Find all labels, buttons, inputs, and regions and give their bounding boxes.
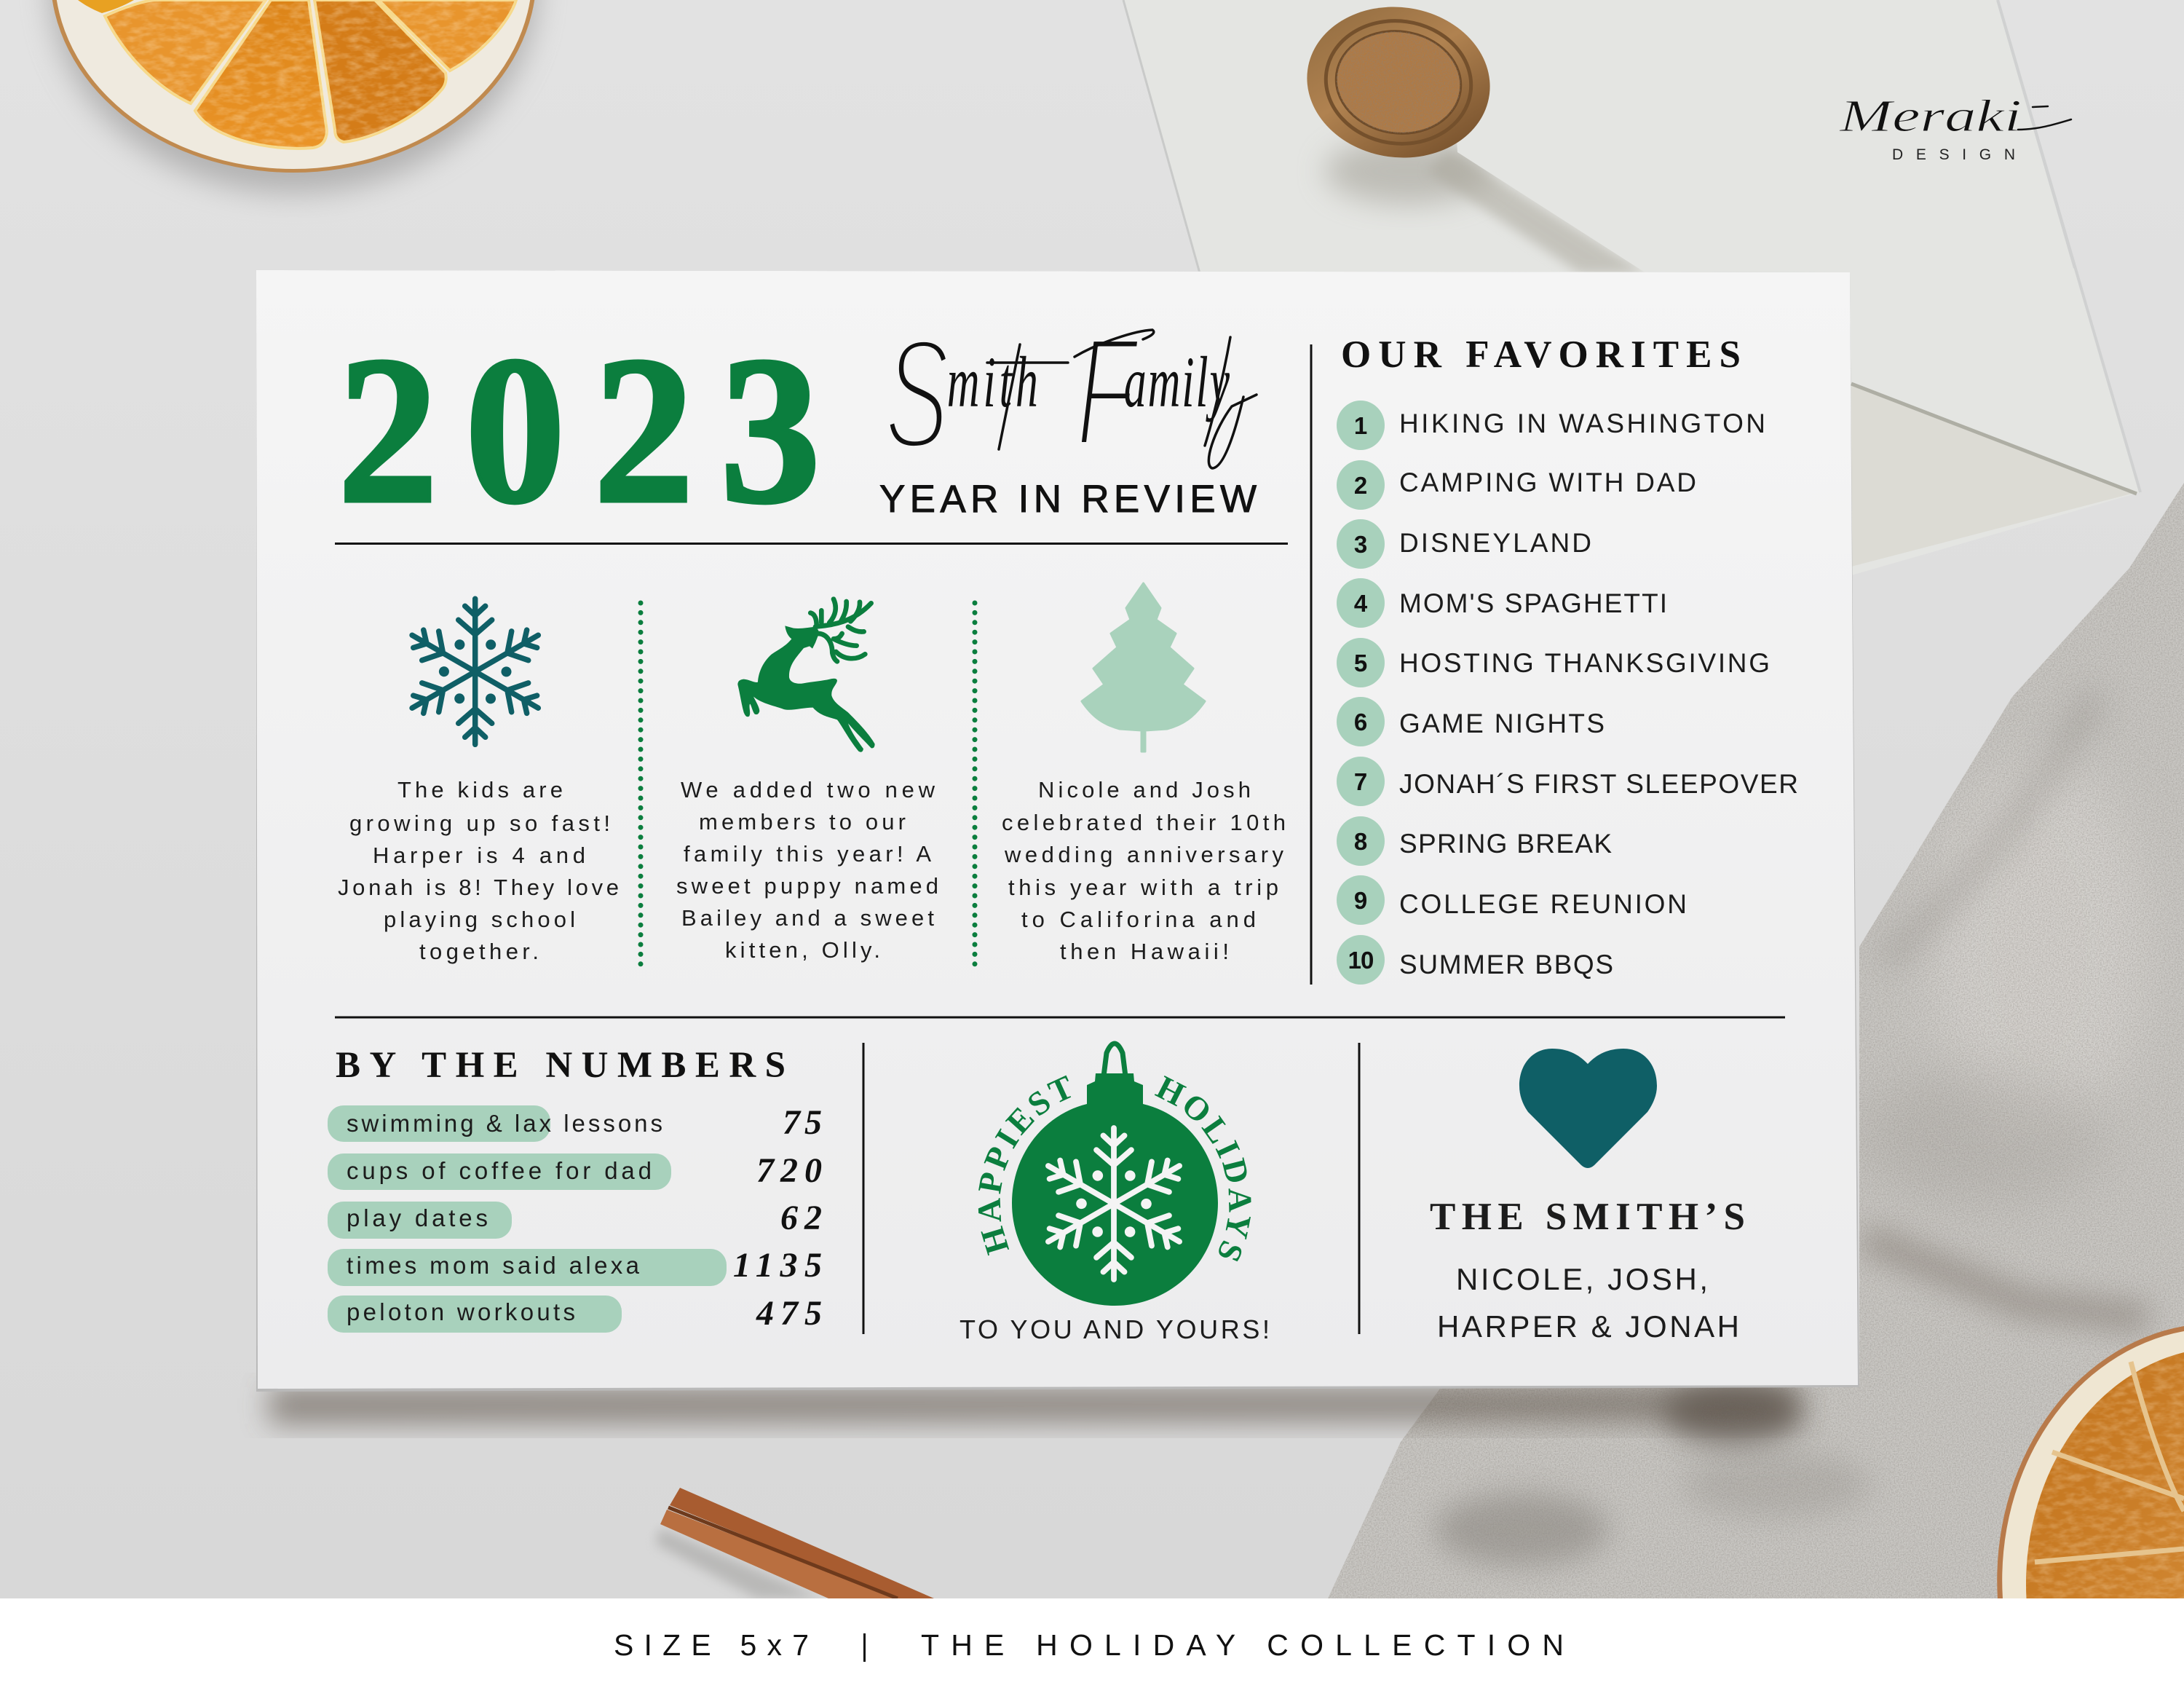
linen cloth <box>1310 466 2184 1598</box>
stat: play dates: 62 <box>780 1199 822 1237</box>
stat: peloton <box>328 1294 822 1333</box>
favorite 8: 8 <box>1354 828 1367 855</box>
favorite 7: JONAH´S FIRST SLEEPOVER <box>1399 769 1798 799</box>
dried orange slice, bottom right <box>1997 1326 2184 1598</box>
favorite 4: 4 <box>1354 590 1368 617</box>
story text: kids: The kids are <box>397 777 563 802</box>
icon: leaping reindeer <box>737 599 875 752</box>
icon: heart <box>1519 1049 1657 1168</box>
favorite 8: SPRING BREAK <box>1399 829 1612 859</box>
card shadow <box>269 1387 1798 1424</box>
story text: anniversary: to Califorina and <box>1021 907 1256 932</box>
story text: pets: members to our <box>699 809 906 835</box>
year heading: 2023: 2023 <box>338 314 820 548</box>
story text: anniversary: celebrated their 10th <box>1002 810 1286 835</box>
curved text: happiest: HAPPIEST <box>978 1075 1072 1255</box>
stat: coffee: cups of coffee for dad <box>347 1157 652 1184</box>
heading: our favorites: OUR FAVORITES <box>1341 334 1741 376</box>
favorite 3: DISNEYLAND <box>1399 528 1591 558</box>
favorite 4: MOM'S SPAGHETTI <box>1399 588 1667 618</box>
story column 1 <box>338 599 619 964</box>
card <box>256 270 1859 1392</box>
cinnamon sticks <box>655 1488 934 1598</box>
favorite 9: COLLEGE REUNION <box>1399 889 1687 919</box>
script title: Smith Family: F <box>1076 304 1140 479</box>
family members line 2: HARPER & JONAH <box>1437 1309 1739 1344</box>
dried orange slice, top left <box>50 0 537 193</box>
favorite 6 <box>1337 697 1605 746</box>
panel: by the numbers <box>328 1045 822 1333</box>
favorite 1: HIKING IN WASHINGTON <box>1399 409 1765 438</box>
story text: kids: playing school <box>384 907 575 932</box>
stat: alexa <box>328 1246 822 1286</box>
favorite 5: 5 <box>1354 650 1367 677</box>
story text: anniversary <box>1002 777 1286 964</box>
story text: pets: sweet puppy named <box>676 873 938 899</box>
stat: coffee: 720 <box>756 1151 822 1190</box>
panel: our favorites <box>1337 334 1798 985</box>
panel: family signature <box>1430 1049 1745 1344</box>
family members line 1: NICOLE, JOSH, <box>1456 1262 1708 1296</box>
divider: favourites column <box>1310 344 1312 985</box>
icon: ornament ball <box>1012 1073 1218 1306</box>
logo: meraki design: DESIGN <box>1892 146 2015 163</box>
stat: peloton: peloton workouts <box>347 1298 575 1325</box>
icon: christmas tree <box>1082 583 1205 752</box>
stat: play dates: play dates <box>347 1204 488 1231</box>
favorite 10: 10 <box>1348 947 1373 974</box>
story text: kids: growing up so fast! <box>349 811 610 836</box>
story column 3 <box>1002 583 1286 964</box>
favorite 2: 2 <box>1354 472 1367 499</box>
logo: meraki design: Meraki <box>1839 92 2022 141</box>
header rule <box>335 543 1288 545</box>
story text: pets: We added two new <box>681 777 935 802</box>
favorite 3: 3 <box>1354 531 1367 558</box>
favorite 10: SUMMER BBQS <box>1399 950 1613 979</box>
icon: ornament loop <box>1104 1044 1125 1076</box>
icon: white snowflake <box>1037 1128 1190 1279</box>
stat: peloton: 475 <box>756 1294 822 1333</box>
favorite 6: GAME NIGHTS <box>1399 709 1605 738</box>
story text: kids: Jonah is 8! They love <box>338 875 619 900</box>
subtitle: year in review: YEAR IN REVIEW <box>879 478 1257 521</box>
dotted divider 1 <box>638 603 644 971</box>
story text: kids <box>338 777 619 964</box>
favorite 9: 9 <box>1354 887 1367 914</box>
wax seal <box>1307 7 1490 157</box>
stat: play dates <box>328 1199 822 1239</box>
story text: kids: together. <box>419 939 539 964</box>
favorite 2: CAMPING WITH DAD <box>1399 468 1696 497</box>
footer: size: SIZE 5x7 <box>614 1628 809 1662</box>
favorite 9 <box>1337 875 1687 925</box>
divider: ornament and signature <box>1358 1043 1360 1334</box>
script title: Smith Family: mith <box>947 342 1042 422</box>
stat: swimming lessons: swimming & lax lessons <box>347 1110 662 1137</box>
panel: happiest holidays ornament <box>960 1041 1270 1344</box>
story text: pets: Bailey and a sweet <box>681 905 934 931</box>
envelope <box>1123 0 2140 575</box>
favorite 3 <box>1337 519 1591 569</box>
story text: anniversary: then Hawaii! <box>1060 939 1229 964</box>
lower rule <box>335 1017 1785 1018</box>
dotted divider 2 <box>973 603 977 971</box>
stat: coffee <box>328 1151 822 1190</box>
footer band <box>0 1598 2184 1688</box>
icon: snowflake <box>402 599 549 744</box>
footer: separator <box>863 1633 866 1662</box>
story text: anniversary: this year with a trip <box>1008 875 1278 900</box>
favorite 7: 7 <box>1354 768 1367 795</box>
logo: meraki design <box>1839 92 2071 163</box>
script title: Smith Family: amily <box>1124 342 1231 422</box>
favorite 1: 1 <box>1354 412 1367 439</box>
favorite 5: HOSTING THANKSGIVING <box>1399 648 1770 678</box>
story text: pets <box>676 777 938 963</box>
favorite 10 <box>1337 935 1613 985</box>
favorite 6: 6 <box>1354 709 1367 735</box>
favorite 4 <box>1337 578 1667 628</box>
stat: swimming lessons: 75 <box>783 1103 822 1142</box>
caption: to you and yours: TO YOU AND YOURS! <box>960 1314 1270 1344</box>
favorite 2 <box>1337 460 1696 510</box>
favorite 8 <box>1337 816 1612 866</box>
favorite 7 <box>1337 757 1798 806</box>
divider: numbers and ornament <box>862 1043 865 1334</box>
story text: pets: kitten, Olly. <box>725 937 880 963</box>
story text: kids: Harper is 4 and <box>373 843 585 868</box>
story column 2 <box>676 599 938 963</box>
story text: anniversary: Nicole and Josh <box>1038 777 1251 802</box>
stat: alexa: times mom said alexa <box>347 1252 640 1279</box>
curved text: holidays: HOLIDAYS <box>1155 1076 1251 1261</box>
family name: THE SMITH’S <box>1430 1196 1745 1238</box>
stat: swimming lessons <box>328 1103 822 1142</box>
stat: alexa: 1135 <box>733 1246 822 1285</box>
story text: pets: family this year! A <box>684 841 931 867</box>
favorite 1 <box>1337 401 1765 450</box>
script title: Smith Family <box>885 304 1257 481</box>
script title: Smith Family: S <box>885 306 949 481</box>
heading: by the numbers: BY THE NUMBERS <box>336 1045 786 1086</box>
favorite 5 <box>1337 638 1770 687</box>
footer: collection: THE HOLIDAY COLLECTION <box>921 1628 1564 1662</box>
story text: anniversary: wedding anniversary <box>1004 842 1284 867</box>
